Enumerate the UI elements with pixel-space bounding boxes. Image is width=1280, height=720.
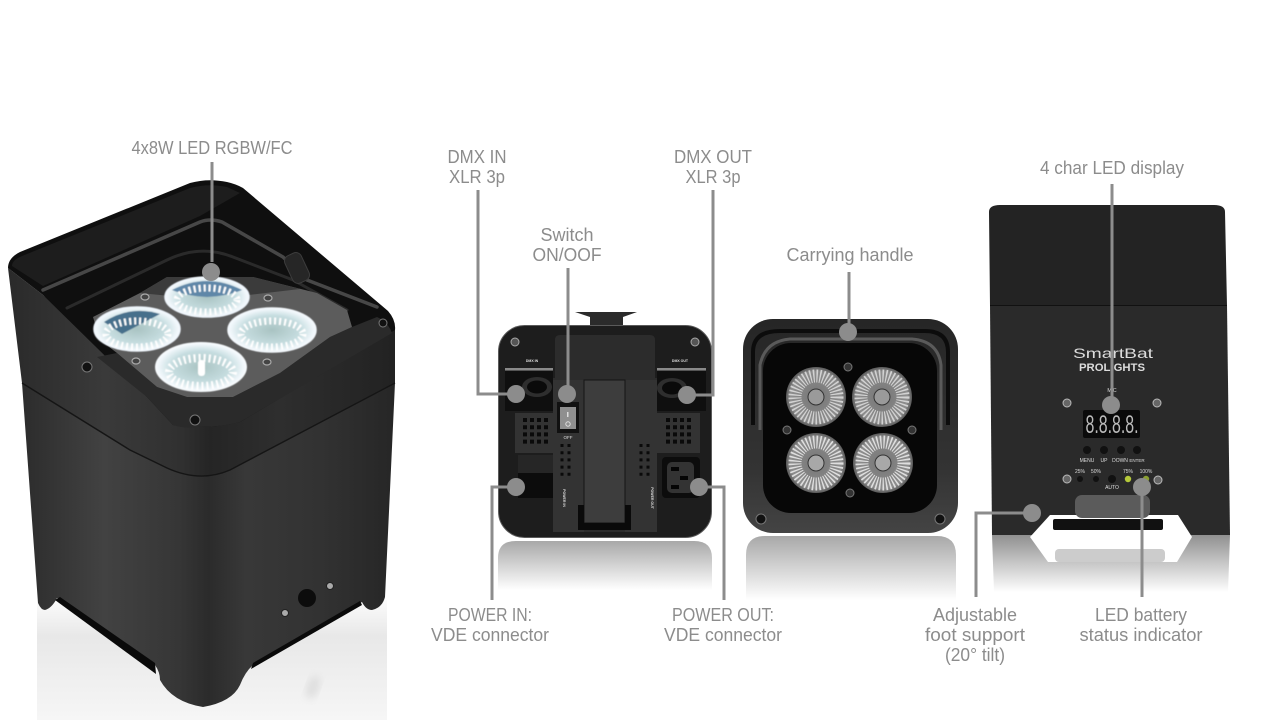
rear housing — [498, 326, 712, 538]
front housing — [743, 319, 958, 533]
battery indicators: 25% — [1075, 469, 1086, 475]
callout: power out: POWER OUT: — [672, 605, 774, 625]
handle tab — [575, 312, 637, 330]
reflection side — [992, 535, 1230, 592]
battery indicators: 100% — [1140, 469, 1153, 475]
LED lenses — [94, 277, 316, 391]
callout: DMX OUT — [674, 147, 752, 404]
lower body — [22, 383, 395, 707]
battery indicators: 50% — [1091, 469, 1102, 475]
callout: carrying handle: Carrying handle — [786, 245, 914, 265]
lens plate — [763, 343, 937, 513]
callout: DMX OUT: DMX OUT — [674, 147, 752, 167]
callout: LED display — [1040, 158, 1184, 414]
callout: power in — [431, 478, 549, 645]
foot cut-out — [1030, 515, 1192, 562]
battery indicators: M/C — [1107, 388, 1117, 394]
callout: DMX IN — [448, 147, 525, 403]
callout: LED display: 4 char LED display — [1040, 158, 1184, 178]
reflection rear — [498, 541, 712, 590]
foot slot left — [55, 597, 156, 674]
callout: foot support: foot support — [925, 625, 1025, 645]
bracket foot — [578, 505, 631, 530]
menu buttons — [1080, 446, 1145, 464]
glass screws — [132, 294, 272, 365]
tiny rear labels: DMX IN — [526, 359, 539, 363]
callout: DMX IN: DMX IN — [448, 147, 506, 167]
callout: carrying handle — [786, 245, 914, 341]
front lenses — [786, 367, 913, 493]
rocker switch: OFF — [564, 435, 573, 440]
callout: 4x8W LED RGBW/FC: 4x8W LED RGBW/FC — [132, 138, 292, 158]
rocker switch — [557, 402, 579, 440]
battery indicators: AUTO — [1105, 485, 1119, 491]
callout: power out — [664, 478, 782, 645]
menu buttons: UP — [1101, 458, 1108, 464]
floor shadow spot — [303, 674, 323, 700]
callout: switch: ON/OOF — [532, 245, 602, 265]
vent grilles — [515, 413, 700, 453]
LED display — [1083, 410, 1140, 439]
callout: foot support: (20° tilt) — [945, 645, 1005, 665]
brand text: PROLIGHTS — [1079, 362, 1145, 374]
callout: battery indicator — [1080, 478, 1203, 645]
side seam — [990, 304, 1227, 306]
panel: rear connector view — [498, 312, 712, 590]
callout: foot support — [925, 504, 1041, 665]
side housing lower — [990, 305, 1230, 535]
handle knob — [283, 251, 311, 285]
callout: 4x8W LED RGBW/FC — [132, 138, 292, 281]
bracket vent dots — [562, 444, 648, 479]
brand text — [1073, 345, 1153, 374]
glass panel — [93, 277, 352, 397]
callout: foot support: Adjustable — [933, 605, 1017, 625]
screws rear — [511, 338, 699, 491]
upper body — [8, 268, 395, 476]
tiny rear labels: POWER IN — [562, 489, 566, 507]
power connectors — [518, 455, 700, 498]
rear power port — [282, 582, 334, 616]
callout: battery indicator: status indicator — [1080, 625, 1203, 645]
menu buttons: DOWN — [1112, 458, 1128, 464]
callout: switch: Switch — [540, 225, 594, 245]
brand text: SmartBat — [1073, 345, 1153, 361]
foot slot — [1053, 519, 1163, 530]
reflection front — [746, 536, 956, 600]
seam line — [22, 383, 395, 476]
callout: battery indicator: LED battery — [1095, 605, 1187, 625]
reflected grip — [1055, 549, 1165, 562]
callout: DMX IN: XLR 3p — [449, 167, 505, 187]
support bracket — [553, 335, 657, 532]
glass reflection — [140, 277, 300, 296]
menu buttons: MENU — [1080, 458, 1095, 464]
battery indicators: 75% — [1123, 469, 1134, 475]
bracket centre strip — [584, 380, 625, 523]
tiny rear labels: DMX OUT — [672, 359, 689, 363]
screws — [82, 319, 387, 425]
panel: side display view — [989, 205, 1230, 592]
hood inner wall — [12, 185, 240, 286]
bracket side panels — [553, 380, 657, 532]
callout: switch — [532, 225, 602, 403]
front screws — [756, 363, 945, 524]
front bezel — [97, 317, 392, 428]
hood interior — [8, 180, 395, 427]
panel: angled product view — [8, 180, 395, 720]
callout: power in: POWER IN: — [448, 605, 532, 625]
foot grip — [1075, 495, 1150, 518]
tiny rear labels: POWER OUT — [650, 487, 654, 510]
hood handle lines — [43, 220, 377, 310]
callout: power in: VDE connector — [431, 625, 549, 645]
callout: power out: VDE connector — [664, 625, 782, 645]
side screws — [1063, 399, 1162, 484]
front handle loop — [753, 331, 948, 430]
side housing upper — [989, 205, 1227, 306]
panel: front lens view — [743, 319, 958, 600]
tiny rear labels — [526, 359, 689, 510]
menu buttons: ENTER — [1129, 458, 1145, 463]
callout: DMX OUT: XLR 3p — [686, 167, 740, 187]
reflection under angled unit — [37, 600, 387, 720]
LED display: 8.8.8.8. — [1086, 411, 1138, 439]
foot slot right — [251, 601, 362, 669]
DMX connector bays — [505, 368, 706, 411]
battery indicators — [1075, 388, 1153, 491]
